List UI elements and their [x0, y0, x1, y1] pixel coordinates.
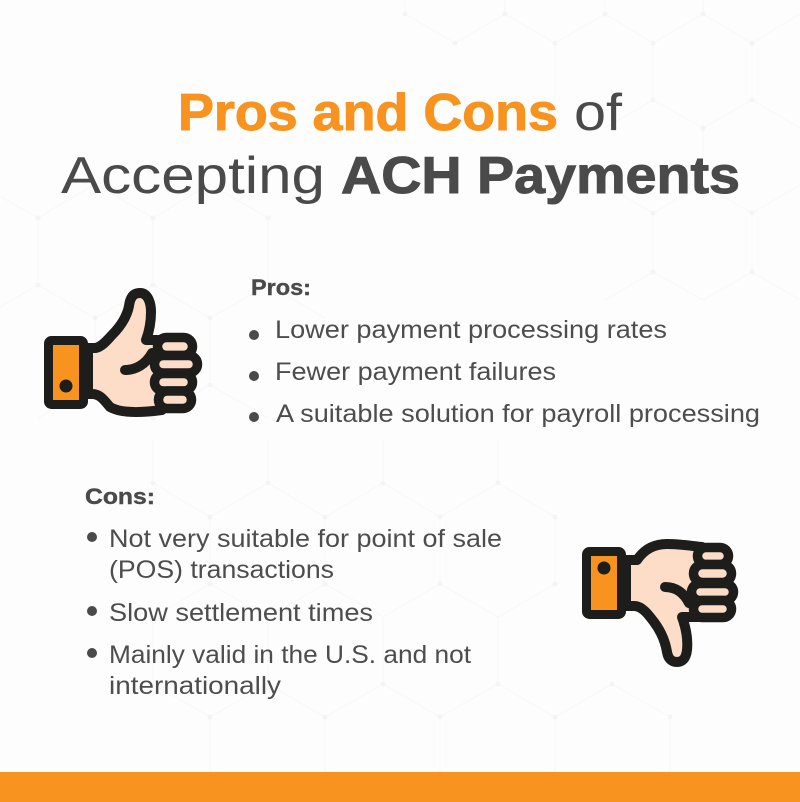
cons list: Mainly valid in the U.S. and not: [109, 641, 471, 669]
pros list: [249, 316, 760, 428]
footer bar: [0, 772, 800, 802]
pros heading: Pros:: [251, 275, 311, 300]
pros list: A suitable solution for payroll processing: [276, 400, 760, 428]
cons list: [87, 525, 502, 700]
cons list: Not very suitable for point of sale: [109, 525, 502, 553]
icon: thumbs down: [586, 544, 734, 662]
icon: thumbs up: [48, 293, 198, 412]
title: Pros and Cons: [178, 84, 558, 142]
title: ACH Payments: [341, 147, 740, 205]
cons heading: Cons:: [85, 484, 155, 509]
title: of: [574, 84, 623, 142]
pros list: Lower payment processing rates: [275, 316, 667, 344]
title: [61, 84, 740, 205]
cons list: (POS) transactions: [109, 556, 334, 584]
cons list: Slow settlement times: [109, 599, 373, 627]
cons list: internationally: [109, 672, 282, 700]
title: Accepting: [61, 147, 325, 205]
pros list: Fewer payment failures: [275, 358, 556, 386]
